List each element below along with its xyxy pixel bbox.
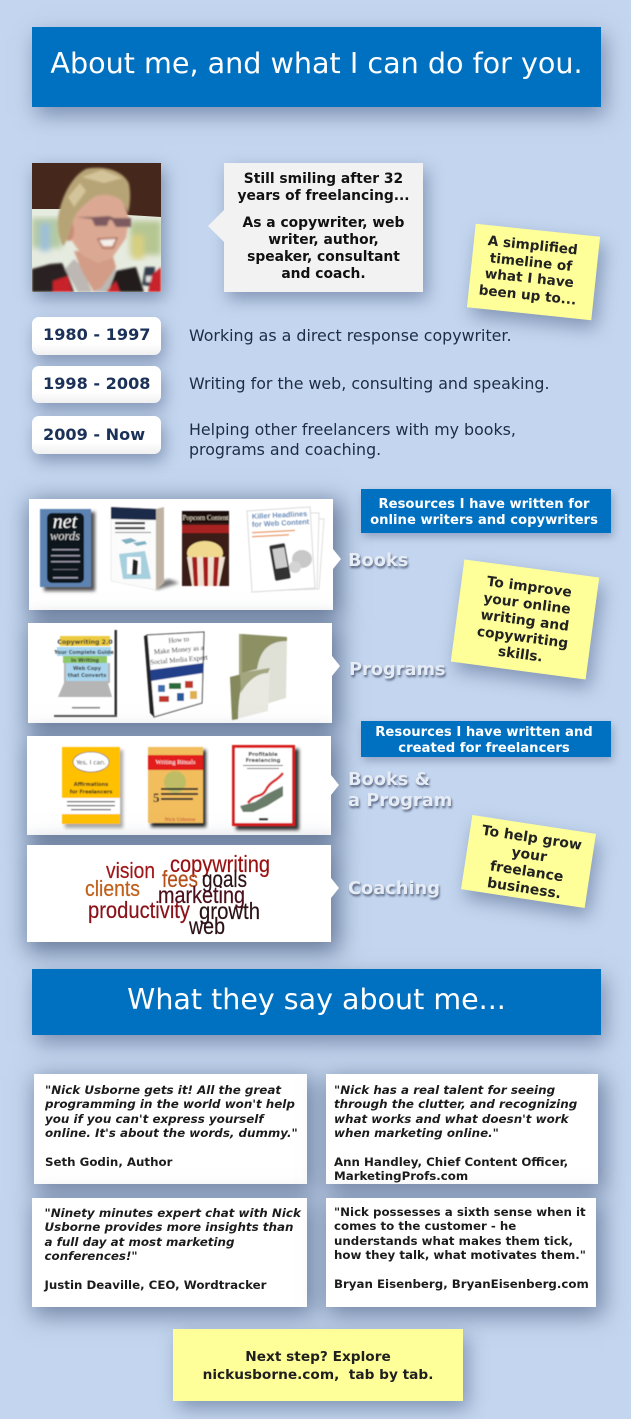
banner: resources for freelancers: Resources I have written and (375, 724, 593, 740)
report: Killer Headlines: Killer Headlines (252, 509, 307, 521)
label: Programs: Programs (349, 659, 446, 680)
testimonial: Justin Deaville: conferences!" (44, 1249, 138, 1263)
sticky note: improve skills: writing and (480, 607, 570, 634)
timeline text 2: Writing for the web, consulting and speaking. (189, 374, 550, 393)
book: Popcorn Content: Popcorn Content (183, 515, 229, 522)
sticky note: timeline: A simplified (487, 233, 578, 258)
word cloud: copywriting (170, 851, 270, 877)
panel: coaching (27, 845, 331, 942)
testimonials banner (32, 969, 601, 1035)
testimonial: Bryan Eisenberg: understands what makes them tick, (334, 1234, 573, 1248)
sticky note: improve skills (451, 559, 599, 679)
program: Copywriting 2.0 (53, 630, 116, 717)
timeline pill: 2009 (32, 416, 161, 454)
testimonial: Justin Deaville: a full day at most marketing (44, 1235, 235, 1249)
sticky note: timeline: timeline of (489, 249, 572, 274)
book: Writing Rituals: 5 (153, 790, 160, 805)
program: Social Media Expert: Social Media Expert (149, 654, 207, 667)
program: Social Media Expert: How to (168, 635, 190, 645)
label: Books: Books (348, 550, 408, 571)
book: Affirmations: Affirmations (74, 782, 108, 788)
banner: resources for writers (361, 489, 611, 533)
testimonial: Seth Godin (34, 1074, 307, 1184)
testimonials banner: What they say about me... (127, 983, 506, 1016)
sticky note: improve skills: your online (482, 590, 572, 617)
testimonial: Seth Godin: Seth Godin, Author (45, 1155, 172, 1169)
book: Writing Rituals: Nick Usborne (165, 817, 196, 823)
testimonial: Bryan Eisenberg (326, 1198, 596, 1307)
pointer (331, 775, 339, 795)
program: Copywriting 2.0: Web Copy (72, 666, 101, 672)
book: Profitable Freelancing: Freelancing (246, 758, 281, 764)
testimonial: Justin Deaville (32, 1198, 307, 1307)
testimonial: Ann Handley (326, 1074, 598, 1184)
timeline text 1: Working as a direct response copywriter. (189, 326, 512, 345)
title banner (32, 27, 601, 107)
testimonial: Bryan Eisenberg: "Nick possesses a sixth sense when it (334, 1205, 586, 1219)
program: Copywriting 2.0: that Converts (67, 673, 106, 679)
sticky note: grow business: To help grow (481, 823, 583, 854)
pointer (331, 878, 339, 898)
banner: resources for freelancers (361, 721, 611, 757)
book: Writing Rituals: Writing Rituals (156, 759, 196, 766)
speech bubble: and coach. (281, 266, 366, 282)
sticky note: timeline (466, 223, 600, 320)
testimonial: Justin Deaville: Justin Deaville, CEO, Wordtracker (44, 1278, 266, 1292)
timeline pill: 1998 (32, 366, 161, 403)
photo: portrait (32, 163, 161, 292)
word cloud: vision (106, 858, 155, 883)
testimonial: Justin Deaville: "Ninety minutes expert chat with Nick (44, 1206, 301, 1220)
sticky note: improve skills: skills. (497, 643, 544, 665)
program: Social Media Expert (144, 632, 207, 717)
book: website sales copy (111, 507, 179, 590)
sticky note: grow business: freelance (489, 858, 564, 885)
word cloud: productivity (88, 897, 190, 923)
timeline pill: 1980 (32, 317, 161, 355)
testimonial: Seth Godin: you if you can't express yourself (45, 1112, 264, 1126)
banner: resources for writers: online writers and copywriters (370, 513, 598, 528)
call to action: nickusborne.com, tab by tab. (203, 1366, 433, 1382)
word cloud: web (188, 913, 225, 939)
book: Profitable Freelancing: Profitable (248, 752, 278, 758)
book: Affirmations: for Freelancers (70, 790, 112, 796)
panel: programs (28, 623, 332, 723)
report: Killer Headlines: for Web Content (252, 517, 310, 529)
bubble pointer (208, 210, 224, 242)
sticky note: improve skills: copywriting (476, 623, 569, 651)
word cloud: clients (85, 876, 140, 901)
program: product box (230, 634, 286, 720)
sticky note: grow business (461, 815, 595, 908)
word cloud: growth (199, 898, 260, 924)
book: Profitable Freelancing (234, 746, 299, 830)
word cloud (85, 851, 270, 939)
speech bubble: Still smiling after 32 (244, 171, 403, 187)
program: Social Media Expert: Make Money as a (153, 644, 204, 656)
book: Popcorn Content (182, 511, 229, 586)
banner: resources for freelancers: created for freelancers (398, 740, 570, 756)
timeline text 3: programs and coaching. (189, 440, 381, 459)
word cloud: goals (202, 866, 247, 892)
sticky note: timeline: what I have (484, 265, 574, 291)
sticky note: improve skills: To improve (486, 573, 573, 600)
program: Copywriting 2.0: Copywriting 2.0 (57, 639, 113, 646)
program: Copywriting 2.0: Your Complete Guide (53, 650, 114, 656)
book: Writing Rituals (148, 747, 206, 827)
book: Net Words: words (50, 529, 80, 543)
sticky note: grow business: business. (486, 875, 562, 902)
label: Books and a Program: Books & (348, 769, 430, 790)
testimonial: Ann Handley: Ann Handley, Chief Content Officer, (334, 1155, 568, 1169)
testimonial: Seth Godin: "Nick Usborne gets it! All the great (45, 1083, 281, 1097)
timeline pill: 2009: 2009 - Now (43, 425, 145, 444)
testimonial: Bryan Eisenberg: how they talk, what motivates them." Bryan Eisenberg, BryanEisenberg.com (334, 1248, 589, 1291)
timeline text 3 (189, 420, 516, 459)
timeline text 3: Helping other freelancers with my books, (189, 420, 516, 439)
testimonial: Ann Handley: when marketing online." (334, 1126, 499, 1140)
testimonial: Ann Handley: what works and what doesn't work (334, 1112, 569, 1126)
pointer (332, 656, 340, 676)
program: Copywriting 2.0: In Writing (70, 658, 99, 664)
speech bubble: years of freelancing... As a copywriter, web (237, 188, 410, 231)
testimonial: Seth Godin: online. It's about the words, dummy." (45, 1126, 298, 1140)
testimonial: Ann Handley: through the clutter, and recognizing (334, 1097, 577, 1111)
testimonial: Ann Handley: "Nick has a real talent for seeing (334, 1083, 555, 1097)
word cloud: fees (162, 866, 198, 892)
call to action: Next step? Explore (245, 1349, 391, 1365)
testimonial: Ann Handley: MarketingProfs.com (334, 1169, 468, 1183)
speech bubble (224, 163, 423, 292)
timeline pill: 1980: 1980 - 1997 (43, 325, 150, 344)
panel: books (29, 499, 333, 610)
label: Coaching: Coaching (348, 878, 440, 899)
book: Affirmations (62, 747, 123, 828)
title banner: About me, and what I can do for you. (50, 46, 583, 80)
book: Net Words: net (53, 511, 78, 533)
label: Books and a Program (348, 769, 454, 813)
testimonial: Justin Deaville: Usborne provides more insights than (44, 1220, 293, 1234)
banner: resources for writers: Resources I have written for (378, 497, 590, 512)
speech bubble: writer, author, (268, 232, 379, 248)
panel: books and a program (27, 736, 331, 835)
pointer (333, 549, 341, 569)
testimonial: Bryan Eisenberg: comes to the customer - he (334, 1219, 516, 1233)
book: Affirmations: Yes, I can. (75, 760, 106, 766)
timeline pill: 1998: 1998 - 2008 (43, 374, 150, 393)
call to action (173, 1329, 463, 1401)
book: Net Words (40, 509, 95, 591)
word cloud: marketing (158, 882, 245, 908)
label: Books and a Program: a Program (348, 790, 452, 811)
sticky note: timeline: been up to... (477, 281, 577, 308)
speech bubble: speaker, consultant (247, 249, 400, 265)
testimonial: Seth Godin: programming in the world won't help (45, 1097, 295, 1111)
report: Killer Headlines (247, 507, 324, 592)
sticky note: grow business: your (510, 844, 548, 866)
